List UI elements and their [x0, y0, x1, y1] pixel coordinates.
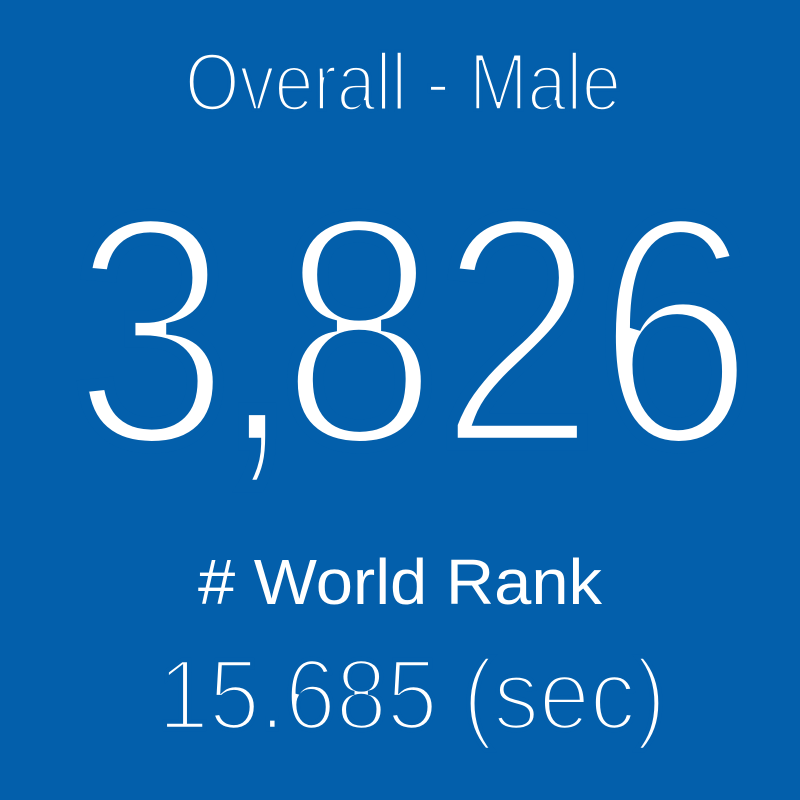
big number: world rank: 3,826 — [72, 148, 755, 514]
title: Overall - Male — [185, 37, 621, 128]
time value: 15.685 (sec) — [158, 639, 666, 751]
metric label: # World Rank — [198, 546, 603, 618]
